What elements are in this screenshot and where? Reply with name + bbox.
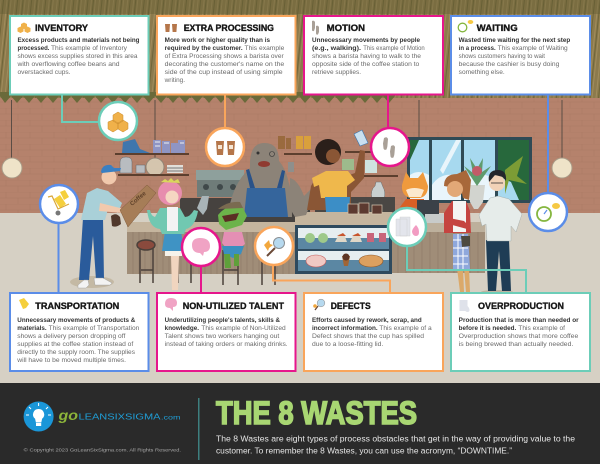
icon circle: transportation: [40, 185, 78, 223]
text: extra processing: of Extra Processing shows a barista over: [165, 54, 284, 60]
text: motion: shows a barista having to walk to the: [312, 54, 422, 60]
divider: [198, 398, 200, 460]
description: [216, 434, 575, 456]
icon circle: motion: [371, 128, 409, 166]
text: extra processing: side of the cup instead of using simple: [165, 70, 283, 76]
text: extra processing: required by the customer.: [165, 46, 243, 52]
logo: LEANSIXSIGMA: [78, 412, 161, 422]
text: defects: due to a loose-fitting lid.: [312, 342, 384, 348]
text: overproduction: Production that is more than needed or: [459, 318, 579, 324]
text: inventory: Excess products and materials not being: [18, 38, 140, 44]
heading: extra processing: EXTRA PROCESSING: [184, 23, 274, 34]
text: defects: incorrect information.: [312, 326, 378, 332]
connector lines: [58, 95, 548, 292]
text: transportation: shows a delivery person dropping off: [17, 334, 126, 340]
icon: cups and spill: [460, 300, 470, 312]
text: transportation: directly to the supply room. The supplies: [17, 350, 135, 356]
icon circle: extra processing: [206, 128, 244, 166]
text: extra processing: More work or higher quality than is: [165, 38, 271, 44]
icon: brain: [165, 298, 177, 311]
text: inventory: with overflowing coffee beans and: [16, 62, 120, 68]
logo: [24, 402, 180, 432]
pendant lamps: [2, 100, 572, 178]
panel: non-utilized talent: [157, 293, 296, 371]
text: inventory: overstacked cups.: [18, 70, 71, 76]
heading: overproduction: OVERPRODUCTION: [478, 301, 564, 312]
icon: coffee cups: [165, 24, 177, 32]
text: inventory: [16, 38, 140, 76]
icon: stopwatch: [458, 20, 473, 32]
icon circle: defects: [255, 227, 293, 265]
text: transportation: supplies at the coffee station instead of: [17, 342, 134, 348]
text: inventory: This example of Inventory: [51, 46, 127, 52]
icon: footprints: [312, 21, 319, 35]
description: customer. To remember the 8 Wastes, you can use the acronym, “DOWNTIME.”: [216, 446, 512, 456]
text: non-utilized talent: knowledge.: [165, 326, 199, 332]
text: waiting: [459, 38, 571, 76]
window: [407, 137, 532, 203]
text: extra processing: writing.: [164, 78, 185, 84]
icon: magnifier: [313, 299, 325, 310]
heading: inventory: INVENTORY: [35, 23, 89, 34]
text: non-utilized talent: instead of taking orders or making drinks.: [165, 342, 288, 348]
text: transportation: This example of Transportation: [49, 326, 139, 332]
pastry display case: [295, 225, 392, 274]
icon circle: non-utilized talent: [182, 228, 220, 266]
text: transportation: Unnecessary movements of products &: [17, 318, 136, 324]
description: The 8 Wastes are eight types of process obstacles that get in the way of providing value to the: [216, 434, 575, 444]
fox cashier: [400, 172, 445, 223]
panel: overproduction: [451, 293, 590, 371]
text: transportation: [16, 318, 139, 364]
text: motion: (e.g., walking).: [312, 46, 361, 52]
barista back counter: [315, 197, 395, 212]
icon circle: inventory: [99, 102, 137, 140]
heading: waiting: WAITING: [477, 23, 518, 34]
text: motion: retrieve supplies.: [312, 70, 361, 76]
text: overproduction: This example of: [518, 326, 565, 332]
heading: transportation: TRANSPORTATION: [35, 301, 119, 312]
frog worker: [218, 202, 247, 268]
text: non-utilized talent: Talent shows two workers hanging out: [165, 334, 280, 340]
icon: boxes: [18, 22, 30, 33]
customer woman: [444, 170, 471, 292]
icon: cart: [19, 298, 29, 309]
text: overproduction: [459, 318, 579, 348]
text: waiting: shows customers having to wait: [459, 54, 545, 60]
footer band: [0, 383, 600, 464]
text: non-utilized talent: This example of Non-Utilized: [201, 326, 286, 332]
text: extra processing: [164, 38, 285, 84]
text: motion: Unnecessary movements by people: [312, 38, 421, 44]
seal barista: [228, 143, 314, 217]
text: waiting: something else.: [459, 70, 505, 76]
title: THE 8 WASTES: [216, 395, 417, 431]
text: extra processing: decorating the customer's name on the: [165, 62, 285, 68]
copyright: © Copyright 2023 GoLeanSixSigma.com. All Rights Reserved.: [24, 446, 181, 454]
panel: inventory: [10, 16, 148, 94]
text: defects: [312, 318, 432, 348]
text: waiting: This example of Waiting: [498, 46, 568, 52]
espresso machine: [180, 170, 310, 222]
delivery person: [70, 165, 156, 288]
pink-haired worker: [147, 178, 198, 290]
text: motion: opposite side of the coffee station to: [312, 62, 420, 68]
text: non-utilized talent: Underutilizing people's talents, skills &: [165, 318, 281, 324]
text: transportation: materials.: [17, 326, 47, 332]
text: overproduction: is being brewed than actually needed.: [459, 342, 574, 348]
icon circle: waiting: [529, 193, 567, 231]
icon circle: overproduction: [388, 208, 426, 246]
front counter: [127, 212, 485, 274]
text: defects: Efforts caused by rework, scrap, and: [312, 318, 422, 324]
text: waiting: in a process.: [459, 46, 496, 52]
text: inventory: shows excess supplies stored in this area: [18, 54, 138, 60]
text: motion: [312, 38, 425, 76]
bar stools: [137, 240, 275, 285]
text: overproduction: Overproduction shows that more coffee: [459, 334, 579, 340]
heading: non-utilized talent: NON-UTILIZED TALENT: [183, 301, 284, 312]
text: transportation: will have to be moved multiple times.: [16, 358, 126, 364]
shelves with supplies: [115, 136, 398, 199]
logo: .com: [161, 414, 180, 422]
text: defects: This example of a: [379, 326, 432, 332]
yellow-shirt barista: [307, 130, 382, 214]
text: overproduction: before it is needed.: [459, 326, 517, 332]
text: inventory: processed.: [18, 46, 50, 52]
potted plant: [464, 158, 491, 209]
panel: extra processing: [157, 16, 296, 94]
text: motion: This example of Motion: [363, 46, 425, 52]
panel: transportation: [10, 293, 148, 371]
text: extra processing: This example: [244, 46, 285, 52]
text: defects: Defect shows that the cup has spilled: [312, 334, 424, 340]
logo: go: [57, 407, 79, 423]
panel: defects: [304, 293, 443, 371]
text: non-utilized talent: [165, 318, 288, 348]
delivery person: Coffee: [129, 191, 148, 208]
heading: motion: MOTION: [327, 23, 365, 34]
text: waiting: Wasted time waiting for the next step: [459, 38, 571, 44]
customer man: [479, 170, 522, 294]
heading: defects: DEFECTS: [331, 301, 371, 312]
panel: waiting: [451, 16, 590, 94]
panel: motion: [304, 16, 443, 94]
text: waiting: because the cashier is busy doing: [459, 62, 559, 68]
